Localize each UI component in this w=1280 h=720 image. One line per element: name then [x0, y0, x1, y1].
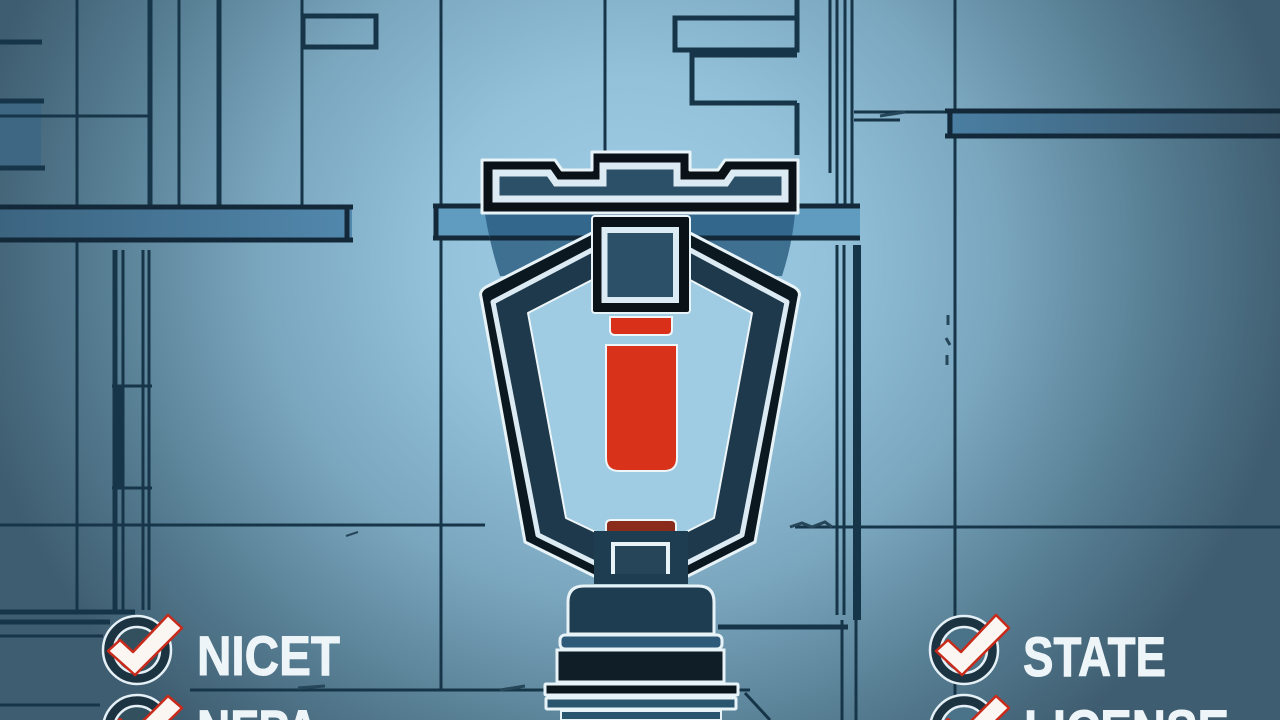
checklist right: LICENSE — [930, 695, 1229, 720]
sprinkler shadow — [485, 214, 795, 276]
frame arms — [481, 233, 799, 576]
label: STATE: STATE — [1023, 625, 1166, 688]
yoke — [594, 531, 688, 584]
threaded body — [545, 586, 738, 720]
icon: check badge — [103, 615, 182, 684]
drawing annotations — [298, 112, 950, 690]
icon: check badge — [930, 695, 1009, 720]
lower red seat — [606, 520, 676, 532]
checklist right: STATE — [930, 615, 1166, 688]
red cap — [610, 317, 672, 335]
icon: check badge — [930, 615, 1009, 684]
label: NICET: NICET — [197, 624, 340, 687]
beam left — [0, 207, 353, 241]
deflector plate — [482, 152, 798, 213]
side panel left — [0, 100, 41, 168]
sprinkler head — [481, 152, 799, 720]
icon: check badge — [103, 695, 182, 720]
beam right — [945, 111, 1280, 136]
red glass bulb — [606, 345, 677, 471]
checklist left: NFPA — [103, 695, 319, 720]
centre block — [592, 216, 690, 313]
checklist left: NICET — [103, 615, 340, 687]
beam centre — [433, 204, 860, 240]
